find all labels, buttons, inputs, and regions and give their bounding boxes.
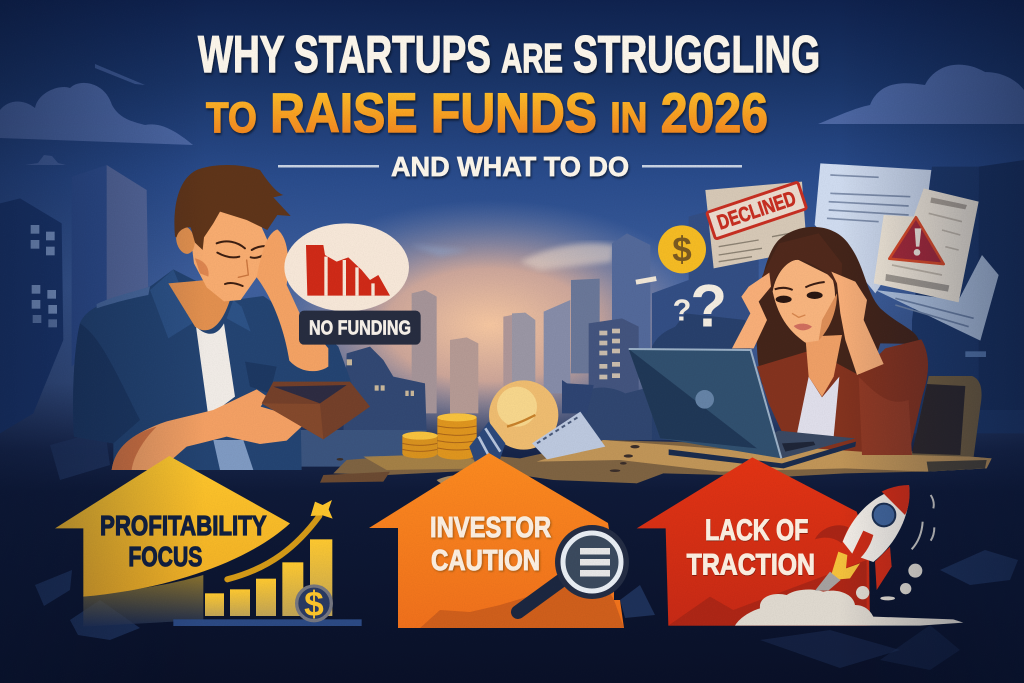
no funding label [299, 311, 421, 345]
speech bubble: falling chart [284, 223, 421, 345]
closed eyes and mouth [217, 241, 267, 286]
right hand [831, 272, 884, 375]
blue sheet [875, 255, 999, 341]
ear [174, 224, 197, 256]
city skyline right and dark wall [512, 160, 1024, 440]
label: INVESTOR [430, 512, 551, 544]
smoke cloud [735, 589, 963, 626]
icon: question marks: ? [690, 273, 727, 340]
declined stamp: DECLINED [714, 187, 799, 235]
face [191, 210, 267, 301]
arrow shape [637, 457, 870, 626]
label: PROFITABILITY [100, 510, 267, 541]
subtitle: AND WHAT TO DO [391, 151, 629, 182]
raised hand [257, 229, 328, 371]
icon: rocket [815, 485, 910, 591]
card: profitability focus: FOCUS [128, 541, 202, 572]
warning paper [874, 188, 979, 302]
card: profitability focus [55, 456, 362, 627]
bars [205, 539, 332, 616]
report sheet [815, 163, 931, 293]
city skyline left [0, 165, 512, 467]
back hair [757, 227, 919, 408]
arrow shape [55, 456, 290, 597]
clouds [0, 64, 1024, 270]
face [773, 260, 835, 343]
icon: dollar coin [658, 225, 706, 273]
title line 2: TO RAISE FUNDS IN 2026 [206, 81, 768, 144]
exhaust puffs [856, 564, 922, 600]
card: investor caution [369, 453, 629, 628]
person: stressed man with wallet [73, 165, 370, 470]
documents: declined, warning [705, 163, 999, 341]
left hand [732, 273, 771, 348]
torn paper [532, 380, 605, 459]
icon: dollar coin: $ [672, 231, 692, 270]
dollar badge [297, 586, 331, 621]
base line [173, 619, 362, 626]
label: LACK OF [705, 514, 808, 547]
motion lines [912, 495, 934, 549]
lower ground shards [35, 430, 1018, 670]
eyes and lips [775, 282, 825, 330]
hair [174, 165, 291, 250]
blouse [797, 377, 839, 437]
card: lack of traction [637, 457, 963, 626]
wallet [262, 382, 370, 439]
gold coin stacks [402, 413, 477, 460]
declined paper [705, 182, 807, 268]
broken light bulb [469, 380, 558, 463]
person: worried woman at laptop [629, 227, 928, 468]
icon: question marks [635, 273, 727, 340]
lower arm and hand [112, 389, 304, 470]
card: profitability focus: $ [304, 585, 324, 624]
growth arrow [227, 516, 319, 579]
arrow shape [369, 453, 624, 628]
chair [912, 376, 982, 457]
icon: magnifier [518, 525, 629, 612]
card: lack of traction: TRACTION [687, 548, 815, 581]
t-shirt [196, 323, 235, 417]
desk [320, 440, 992, 486]
neck [168, 280, 230, 330]
speech bubble: falling chart: NO FUNDING [309, 316, 411, 339]
title [198, 26, 820, 182]
title line 1: WHY STARTUPS ARE STRUGGLING [198, 26, 820, 84]
front hair [762, 233, 842, 293]
laptop [629, 349, 856, 468]
icon: question marks: ? [673, 294, 691, 328]
neck [805, 335, 842, 397]
jacket [757, 339, 928, 455]
warning triangle [889, 217, 944, 264]
jacket [73, 269, 352, 470]
card: investor caution: CAUTION [431, 545, 540, 577]
fade base [83, 575, 203, 627]
